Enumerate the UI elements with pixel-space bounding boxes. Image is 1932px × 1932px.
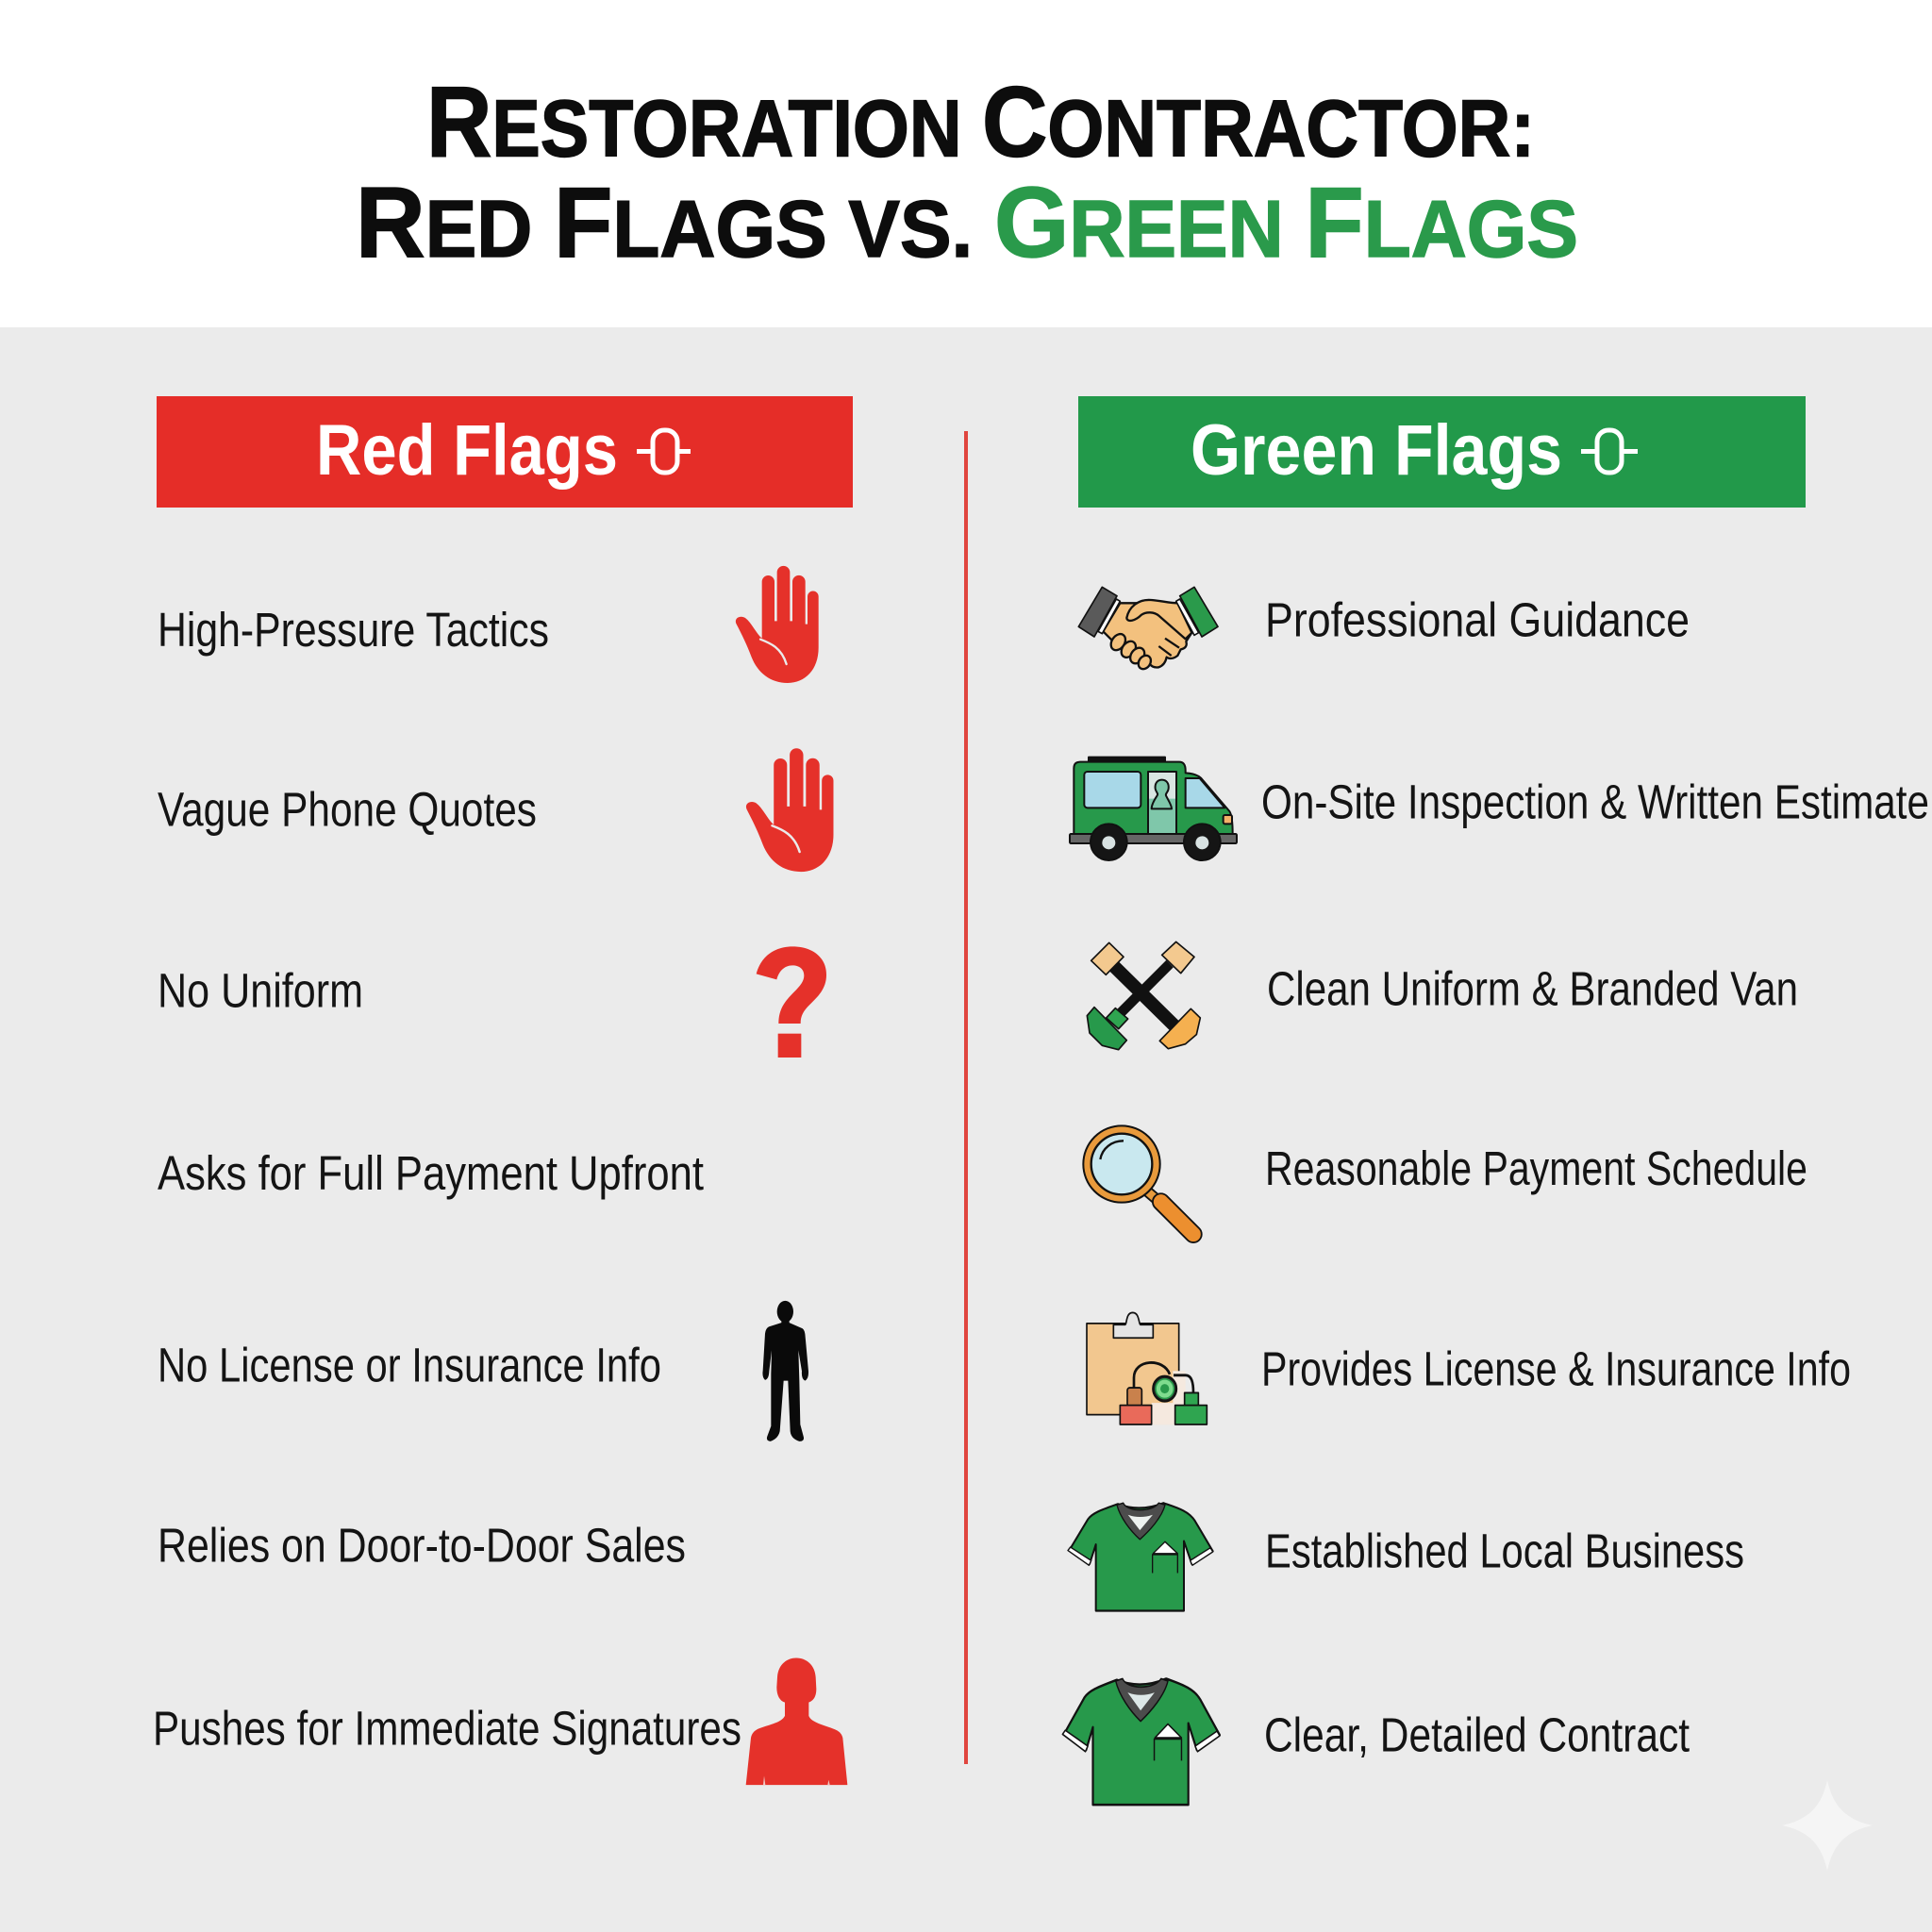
title: RED FLAGS VS. GREEN FLAGS xyxy=(356,167,1578,278)
icon: sparkle watermark xyxy=(1782,1780,1873,1871)
icon: magnifying glass xyxy=(1083,1125,1193,1234)
icon: black person silhouette xyxy=(762,1301,808,1441)
text: No Uniform: No Uniform xyxy=(158,964,363,1017)
header background xyxy=(0,0,1932,327)
icon: red person bust xyxy=(746,1657,847,1785)
panel: green flags header xyxy=(1078,396,1806,508)
text: Professional Guidance: Professional Guidance xyxy=(1265,592,1690,647)
icon: green van xyxy=(1070,758,1237,860)
text: High-Pressure Tactics: High-Pressure Tactics xyxy=(158,603,549,657)
panel: red flags header: Red Flags xyxy=(316,410,618,491)
title xyxy=(356,66,1578,278)
icon: green shirt 1 xyxy=(1068,1503,1213,1610)
icon: handshake xyxy=(1078,587,1218,672)
icon: green shirt 2 xyxy=(1062,1678,1220,1805)
text: Established Local Business: Established Local Business xyxy=(1265,1524,1744,1577)
text: Reasonable Payment Schedule: Reasonable Payment Schedule xyxy=(1265,1141,1807,1195)
text: Clean Uniform & Branded Van: Clean Uniform & Branded Van xyxy=(1267,962,1798,1015)
text: Vague Phone Quotes: Vague Phone Quotes xyxy=(158,783,537,836)
icon: crossed tools xyxy=(1087,941,1200,1050)
text: Relies on Door-to-Door Sales: Relies on Door-to-Door Sales xyxy=(158,1519,686,1572)
text: Clear, Detailed Contract: Clear, Detailed Contract xyxy=(1264,1707,1690,1762)
panel: red flags header xyxy=(157,396,853,508)
title: RESTORATION CONTRACTOR: xyxy=(426,66,1535,177)
icon: red question mark xyxy=(757,946,826,1058)
panel: green flags header: Green Flags xyxy=(1191,410,1562,491)
icon: red hand 2 xyxy=(746,748,833,872)
text: Pushes for Immediate Signatures: Pushes for Immediate Signatures xyxy=(153,1702,741,1755)
center divider xyxy=(964,431,968,1764)
text: Asks for Full Payment Upfront: Asks for Full Payment Upfront xyxy=(158,1146,704,1200)
icon: red hand 1 xyxy=(736,566,819,683)
icon: clipboard with locks xyxy=(1087,1312,1207,1424)
text: No License or Insurance Info: No License or Insurance Info xyxy=(158,1338,661,1392)
